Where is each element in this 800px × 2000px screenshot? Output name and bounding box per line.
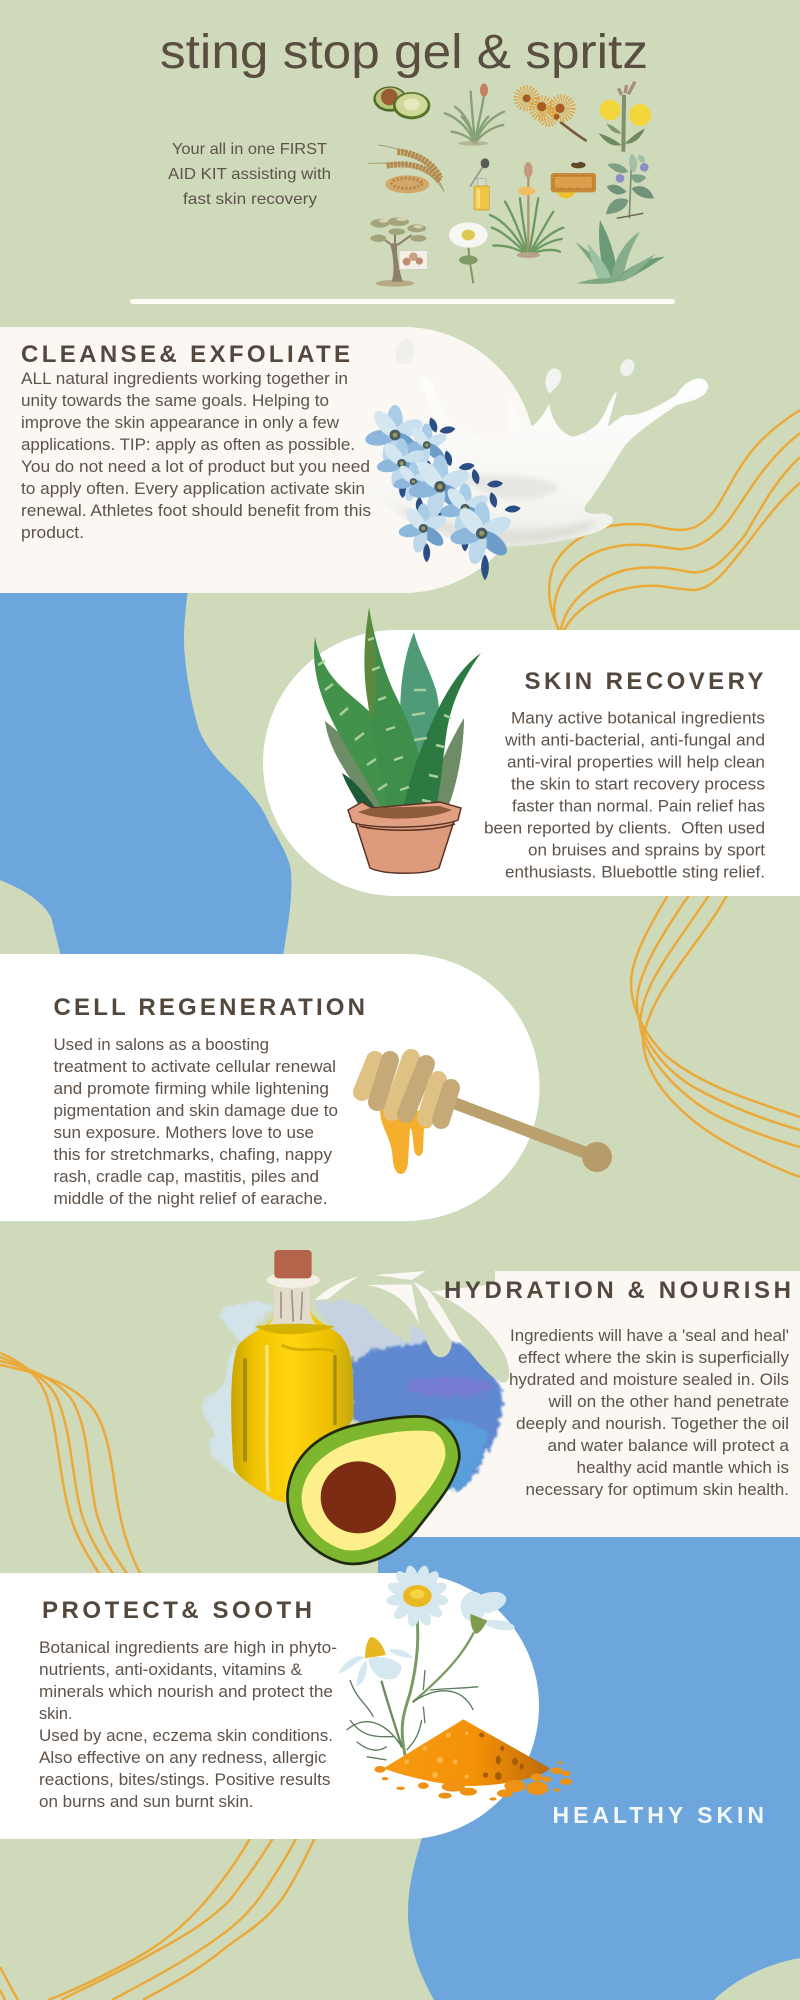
text block: cell regeneration: rash, cradle cap, mastitis, piles and bbox=[54, 1168, 319, 1186]
subtitle: AID KIT assisting with bbox=[168, 166, 331, 183]
title: sting stop gel & spritz bbox=[160, 26, 648, 79]
text block: skin recovery: the skin to start recovery process bbox=[511, 776, 765, 794]
chamomile flowers bbox=[338, 1564, 516, 1687]
text block: protect and sooth: minerals which nourish and protect the bbox=[39, 1683, 333, 1701]
heading: protect and sooth: PROTECT& SOOTH bbox=[42, 1597, 312, 1624]
text block: hydration and nourish: healthy acid mantle which is bbox=[576, 1459, 789, 1477]
text block: cell regeneration: this for stretchmarks, chafing, nappy bbox=[54, 1146, 333, 1164]
heading: hydration and nourish: HYDRATION & NOURISH bbox=[444, 1277, 791, 1304]
icon: dark leaves bbox=[399, 416, 521, 580]
divider bbox=[130, 299, 675, 304]
text block: hydration and nourish: and water balance will protect a bbox=[548, 1437, 790, 1455]
text block: skin recovery bbox=[484, 710, 765, 882]
icon: lily plant bbox=[490, 162, 563, 258]
text block: protect and sooth: nutrients, anti-oxidants, vitamins & bbox=[39, 1661, 302, 1679]
text block: hydration and nourish: will on the other hand penetrate bbox=[547, 1393, 789, 1411]
blue blob: left bbox=[0, 590, 291, 956]
text block: hydration and nourish: effect where the skin is superficially bbox=[518, 1349, 790, 1367]
text block: cell regeneration bbox=[54, 1036, 338, 1208]
text block: protect and sooth: reactions, bites/stings. Positive results bbox=[39, 1771, 330, 1789]
text block: cleanse and exfoliate bbox=[21, 370, 371, 542]
text block: protect and sooth: Used by acne, eczema skin conditions. bbox=[39, 1727, 333, 1745]
panel: protect and sooth bbox=[0, 1573, 539, 1839]
text block: protect and sooth: on burns and sun burnt skin. bbox=[39, 1793, 253, 1811]
text block: protect and sooth: Botanical ingredients are high in phyto- bbox=[39, 1639, 337, 1657]
icon: honeycomb and bee bbox=[551, 159, 596, 198]
icon: aloe vera bbox=[575, 220, 665, 284]
text block: skin recovery: anti-viral properties will help clean bbox=[507, 754, 765, 772]
text block: skin recovery: on bruises and sprains by sport bbox=[528, 842, 765, 860]
icon: milk splash bbox=[376, 337, 708, 547]
icon: marula tree with nuts bbox=[370, 217, 427, 287]
avocado half bbox=[287, 1416, 459, 1564]
icon: dropper bottle bbox=[470, 158, 489, 210]
chamomile stems bbox=[382, 1607, 473, 1755]
subtitle bbox=[168, 141, 331, 208]
text block: cleanse and exfoliate: ALL natural ingredients working together in bbox=[21, 370, 348, 388]
botanical ingredients illustration bbox=[368, 82, 665, 287]
panel: hydration and nourish bbox=[380, 1271, 800, 1537]
icon: evening primrose bbox=[599, 82, 651, 152]
icon: avocado halves bbox=[373, 86, 430, 119]
subtitle: Your all in one FIRST bbox=[172, 141, 327, 158]
icon: sage plant bbox=[606, 153, 654, 218]
oil bottle bbox=[231, 1250, 354, 1505]
icon: potted aloe bbox=[314, 608, 481, 873]
heading: cleanse and exfoliate: CLEANSE& EXFOLIATE bbox=[21, 341, 350, 368]
heading: cell regeneration: CELL REGENERATION bbox=[54, 994, 365, 1021]
dipper ball bbox=[582, 1142, 612, 1172]
dipper handle bbox=[454, 1103, 597, 1157]
watercolour wash bbox=[203, 1300, 502, 1492]
text block: protect and sooth: Also effective on any redness, allergic bbox=[39, 1749, 326, 1767]
text block: cleanse and exfoliate: product. bbox=[21, 524, 84, 542]
text block: hydration and nourish: necessary for optimum skin health. bbox=[526, 1481, 789, 1499]
text block: cleanse and exfoliate: improve the skin appearance in only a few bbox=[21, 414, 339, 432]
text block: skin recovery: with anti-bacterial, anti-fungal and bbox=[504, 732, 765, 750]
illustration: chamomile and turmeric bbox=[338, 1564, 572, 1801]
text block: hydration and nourish bbox=[509, 1327, 790, 1499]
text block: protect and sooth bbox=[39, 1639, 337, 1811]
text block: cleanse and exfoliate: to apply often. Every application activate skin bbox=[21, 480, 365, 498]
heading: skin recovery: SKIN RECOVERY bbox=[524, 668, 764, 695]
panel: cleanse and exfoliate bbox=[0, 327, 536, 593]
text block: hydration and nourish: hydrated and moisture sealed in. Oils bbox=[509, 1371, 789, 1389]
text block: cleanse and exfoliate: applications. TIP: apply as often as possible. bbox=[21, 436, 355, 454]
text block: hydration and nourish: Ingredients will have a 'seal and heal' bbox=[510, 1327, 789, 1345]
text block: cell regeneration: treatment to activate cellular renewal bbox=[54, 1058, 336, 1076]
text block: cell regeneration: pigmentation and skin damage due to bbox=[54, 1102, 338, 1120]
honey drips bbox=[380, 1108, 436, 1174]
icon: grass plant with flower bbox=[445, 83, 504, 146]
flower blossoms bbox=[364, 405, 514, 566]
text block: cell regeneration: and promote firming while lightening bbox=[54, 1080, 329, 1098]
icon: honey dipper bbox=[362, 1058, 612, 1174]
icon: blue borage flowers bbox=[364, 405, 521, 580]
orange wavy lines: bottom left bbox=[0, 1835, 316, 2000]
panel: skin recovery bbox=[263, 630, 800, 896]
orange wavy lines: upper right bbox=[549, 410, 800, 630]
text block: cell regeneration: Used in salons as a boosting bbox=[54, 1036, 269, 1054]
terracotta pot bbox=[348, 802, 461, 873]
green leaf cut-outs bbox=[315, 1271, 509, 1383]
text block: skin recovery: Many active botanical ingredients bbox=[511, 710, 765, 728]
panel: cell regeneration bbox=[0, 954, 540, 1221]
icon: witch hazel bbox=[519, 90, 587, 141]
icon: daisy bbox=[449, 222, 488, 283]
illustration: oil, watercolour and avocado bbox=[203, 1250, 509, 1564]
icon: wheat and grains bbox=[368, 145, 444, 193]
text block: cleanse and exfoliate: You do not need a lot of product but you need bbox=[21, 458, 370, 476]
text block: cleanse and exfoliate: unity towards the same goals. Helping to bbox=[21, 392, 329, 410]
text block: cleanse and exfoliate: renewal. Athletes foot should benefit from this bbox=[21, 502, 371, 520]
dipper ridges bbox=[362, 1058, 451, 1120]
turmeric powder mound bbox=[374, 1719, 572, 1801]
label: healthy skin: HEALTHY SKIN bbox=[552, 1802, 764, 1828]
text block: skin recovery: been reported by clients. Often used bbox=[484, 820, 765, 838]
text block: cell regeneration: sun exposure. Mothers love to use bbox=[54, 1124, 314, 1142]
text block: hydration and nourish: deeply and nourish. Together the oil bbox=[516, 1415, 789, 1433]
text block: skin recovery: faster than normal. Pain relief has bbox=[512, 798, 765, 816]
orange wavy lines: left bbox=[0, 1353, 141, 1575]
aloe leaves bbox=[314, 608, 481, 828]
chamomile ferns bbox=[347, 1670, 478, 1760]
text block: skin recovery: enthusiasts. Bluebottle sting relief. bbox=[505, 864, 765, 882]
text block: cell regeneration: middle of the night relief of earache. bbox=[54, 1190, 328, 1208]
subtitle: fast skin recovery bbox=[183, 191, 317, 208]
text block: protect and sooth: skin. bbox=[39, 1705, 72, 1723]
blue blob: lower right bbox=[378, 1537, 800, 2000]
orange wavy lines: middle right bbox=[631, 895, 800, 1177]
